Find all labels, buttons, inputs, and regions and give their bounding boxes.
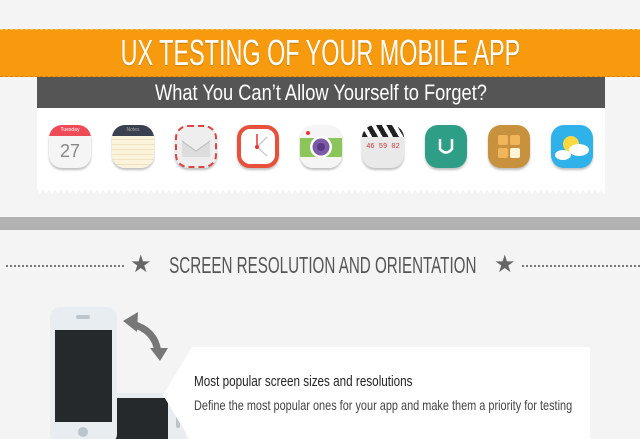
icon: clock — [237, 125, 279, 168]
icon: weather — [551, 125, 593, 168]
icon: notes — [112, 125, 154, 168]
icon: calculator — [488, 125, 530, 168]
icon: bag — [425, 125, 467, 168]
icon: calendar — [49, 125, 91, 168]
icon: calendar: Tuesday — [60, 127, 80, 133]
zigzag edge — [38, 190, 605, 194]
section heading: ★ — [494, 251, 516, 278]
section heading: SCREEN RESOLUTION AND ORIENTATION — [169, 252, 477, 278]
icon: mail — [175, 125, 217, 168]
gray separator bar — [0, 217, 640, 230]
icon: clapper: 46 59 02 — [366, 143, 400, 151]
callout body: Define the most popular ones for your app and make them a priority for testing — [194, 397, 572, 413]
icon panel — [37, 108, 605, 190]
subtitle band — [37, 77, 605, 108]
icon: clapper — [362, 125, 404, 168]
icon: camera — [300, 125, 342, 168]
callout heading: Most popular screen sizes and resolutions — [194, 373, 413, 390]
section heading — [6, 251, 640, 278]
subtitle band: What You Can’t Allow Yourself to Forget? — [155, 80, 487, 105]
title banner — [0, 29, 640, 77]
title banner: UX TESTING OF YOUR MOBILE APP — [120, 32, 520, 73]
section heading: ★ — [130, 251, 152, 278]
icon: calendar: 27 — [60, 141, 80, 161]
icon: notes: Notes — [126, 127, 140, 133]
illustration: rotating phones — [50, 307, 186, 439]
callout — [163, 347, 590, 439]
